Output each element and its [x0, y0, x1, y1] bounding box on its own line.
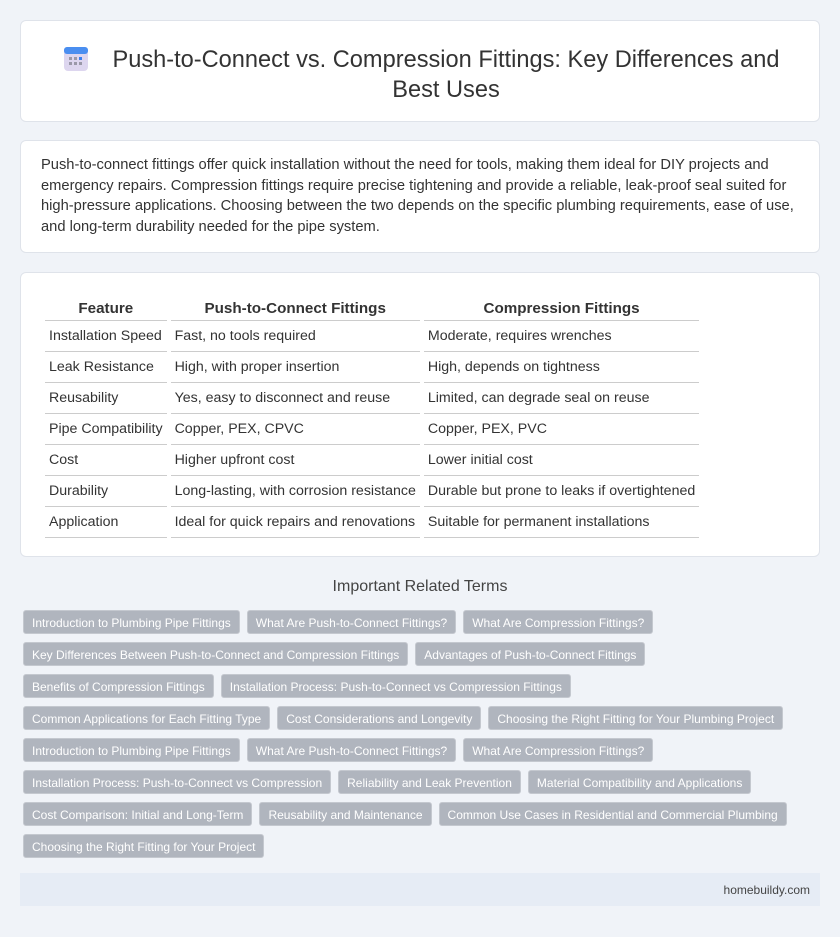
related terms tags: Choosing the Right Fitting for Your Plumbing Project [497, 712, 774, 726]
comparison table: Compression Fittings [484, 300, 640, 317]
comparison table: Cost [49, 452, 78, 468]
related terms tags: Installation Process: Push-to-Connect vs Compression [32, 776, 322, 790]
related terms tags: What Are Compression Fittings? [472, 616, 644, 630]
related terms tags: Common Use Cases in Residential and Commercial Plumbing [448, 808, 778, 822]
comparison table: Fast, no tools required [175, 328, 316, 344]
header card [20, 20, 820, 122]
related terms tags: Common Applications for Each Fitting Type [32, 712, 261, 726]
comparison table: Copper, PEX, CPVC [175, 421, 304, 437]
title: Push-to-Connect vs. Compression Fittings: Key Differences and Best Uses [112, 47, 780, 103]
related terms tags: Introduction to Plumbing Pipe Fittings [32, 744, 231, 758]
related terms tags: Cost Considerations and Longevity [286, 712, 472, 726]
related terms tags: Reliability and Leak Prevention [347, 776, 512, 790]
comparison table: Ideal for quick repairs and renovations [175, 514, 415, 530]
comparison table: Copper, PEX, PVC [428, 421, 547, 437]
icon: calendar [64, 47, 88, 71]
comparison table: Push-to-Connect Fittings [205, 300, 386, 317]
related terms tags: Material Compatibility and Applications [537, 776, 742, 790]
comparison table: Higher upfront cost [175, 452, 294, 468]
comparison table: Installation Speed [49, 328, 162, 344]
intro text [20, 140, 820, 253]
comparison table: Pipe Compatibility [49, 421, 163, 437]
related terms tags [23, 610, 787, 858]
comparison table: Lower initial cost [428, 452, 533, 468]
related terms tags: Introduction to Plumbing Pipe Fittings [32, 616, 231, 630]
related terms tags: Advantages of Push-to-Connect Fittings [424, 648, 636, 662]
comparison table [20, 272, 820, 557]
related terms tags: Benefits of Compression Fittings [32, 680, 205, 694]
comparison table: Reusability [49, 390, 118, 406]
comparison table: Limited, can degrade seal on reuse [428, 390, 650, 406]
footer [20, 873, 820, 906]
related terms tags: Cost Comparison: Initial and Long-Term [32, 808, 243, 822]
comparison table: High, with proper insertion [175, 359, 339, 375]
related terms tags: Choosing the Right Fitting for Your Project [32, 840, 255, 854]
related terms tags: What Are Push-to-Connect Fittings? [256, 616, 447, 630]
comparison table: Durable but prone to leaks if overtightened [428, 483, 695, 499]
comparison table: Yes, easy to disconnect and reuse [175, 390, 390, 406]
comparison table: Application [49, 514, 118, 530]
comparison table: Feature [78, 300, 133, 317]
related terms heading: Important Related Terms [333, 578, 507, 595]
related terms tags: What Are Compression Fittings? [472, 744, 644, 758]
comparison table: Durability [49, 483, 108, 499]
related terms tags: Key Differences Between Push-to-Connect and Compression Fittings [32, 648, 399, 662]
comparison table: Suitable for permanent installations [428, 514, 650, 530]
comparison table: Leak Resistance [49, 359, 154, 375]
related terms tags: Reusability and Maintenance [268, 808, 423, 822]
comparison table: High, depends on tightness [428, 359, 600, 375]
related terms tags: Installation Process: Push-to-Connect vs Compression Fittings [230, 680, 562, 694]
comparison table: Long-lasting, with corrosion resistance [175, 483, 416, 499]
comparison table: Moderate, requires wrenches [428, 328, 612, 344]
intro text: Push-to-connect fittings offer quick installation without the need for tools, making them ideal for DIY projects and emergency repairs. Compression fittings require precise tightening and provide a reliable, leak-proof seal suited for high-pressure applications. Choosing between the two depends on the specific plumbing requirements, ease of use, and long-term durability needed for the pipe system. [41, 157, 794, 234]
footer: homebuildy.com [724, 883, 810, 897]
related terms tags: What Are Push-to-Connect Fittings? [256, 744, 447, 758]
